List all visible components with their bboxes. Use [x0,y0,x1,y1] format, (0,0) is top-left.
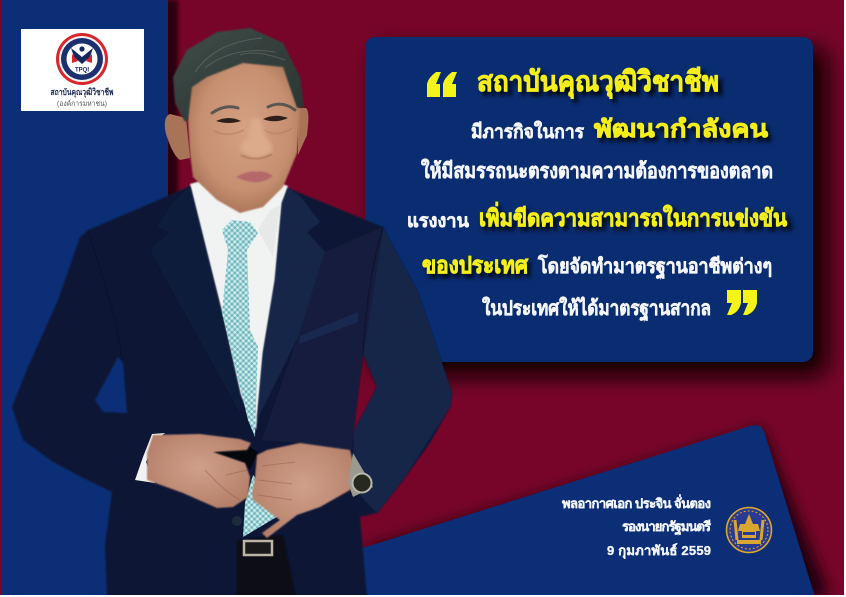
panel: quote box shadow [375,48,827,376]
mouth [236,172,273,182]
left hand [147,434,251,508]
trousers [237,535,296,597]
line 1: มีภารกิจในการ [471,120,585,143]
signature block [562,494,711,559]
right eye [263,116,288,121]
left ear [165,114,190,160]
shirt [190,170,288,430]
dark gap between hands [213,447,258,470]
panel: left navy column [1,0,178,597]
photo: man in suit [12,28,452,597]
icon: institute seal: TPQI [75,68,89,74]
left hand finger lines [205,470,247,500]
line 3: แรงงาน [407,211,469,232]
headline: สถาบันคุณวุฒิวิชาชีพ [477,66,719,99]
belt buckle [244,541,272,555]
line 4: โดยจัดทำมาตรฐานอาชีพต่างๆ [537,254,772,280]
left lapel [150,186,240,413]
right hand [252,443,355,538]
tie lower [243,475,280,537]
left eye [216,118,241,123]
face [186,60,300,213]
headline shadow: สถาบันคุณวุฒิวิชาชีพ [481,70,723,103]
jacket with arm gaps [12,186,452,597]
tie [222,220,258,437]
right lapel [257,188,325,420]
collar shade [258,205,280,257]
right brow [268,104,295,110]
jacket right chest tone [262,227,383,450]
quote text [407,66,792,322]
line 3 highlight shadow: เพิ่มขีดความสามารถในการแข่งขัน [482,205,792,235]
line 3 highlight: เพิ่มขีดความสามารถในการแข่งขัน [479,201,787,231]
jacket right arm tone [353,227,452,513]
logo card [21,29,144,111]
hair streaks [195,38,285,72]
eye bags [214,128,292,134]
right ear [298,108,308,155]
line 1 highlight: พัฒนากำลังคน [594,116,769,143]
position: รองนายกรัฐมนตรี [622,519,711,536]
arm seams [88,227,383,360]
line 2: ให้มีสมรรถนะตรงตามความต้องการของตลาด [421,158,773,183]
nose [240,118,272,158]
jacket button [232,516,242,526]
icon: government seal [726,508,772,552]
icon: opening quote marks [427,72,457,97]
icon: closing quote marks [727,290,757,315]
line 1 highlight shadow: พัฒนากำลังคน [597,120,772,147]
watch [348,453,373,497]
line 5: ในประเทศให้ได้มาตรฐานสากล [482,296,711,322]
left cuff [135,433,165,483]
logo subtitle: (องค์การมหาชน) [57,99,107,108]
panel: quote box [365,37,813,362]
bottom strip [0,595,846,597]
right hand finger lines [258,462,295,500]
line 4 highlight shadow: ของประเทศ [425,256,531,282]
panel: bottom navy wedge [350,425,830,597]
left brow [212,107,238,113]
logo name: สถาบันคุณวุฒิวิชาชีพ [50,87,114,98]
name: พลอากาศเอก ประจิน จั่นตอง [562,494,711,511]
chest pocket [299,312,358,344]
line 4 highlight: ของประเทศ [422,252,528,278]
nose shadow [241,154,272,159]
date: 9 กุมภาพันธ์ 2559 [607,543,711,559]
hair [173,28,304,122]
